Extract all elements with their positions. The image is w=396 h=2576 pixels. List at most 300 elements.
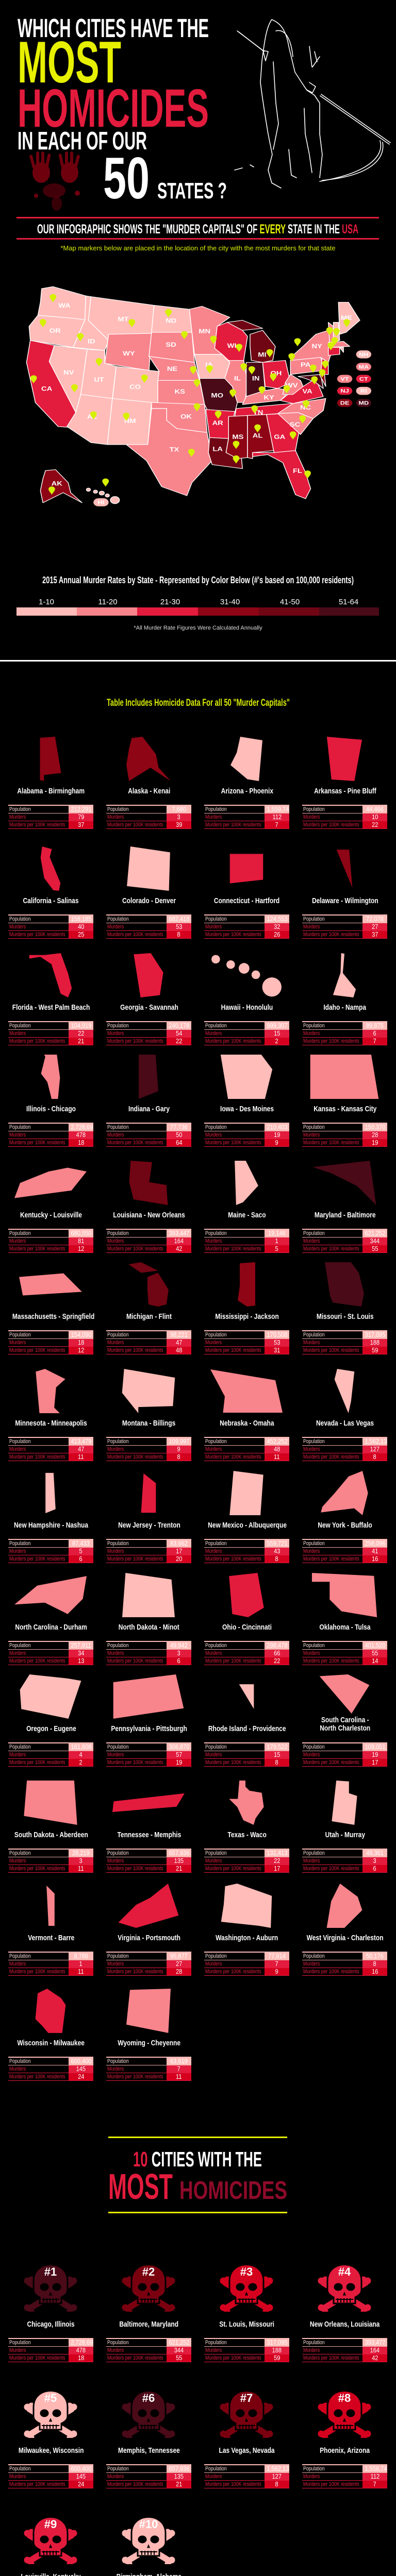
- map state labels: VA: [302, 388, 312, 395]
- card: Minnesota: [8, 1368, 93, 1462]
- name: West Virginia - Charleston: [307, 1934, 383, 1942]
- name: Florida - West Palm Beach: [12, 1003, 90, 1012]
- table: Murders per 100K residents: [9, 2074, 65, 2080]
- map small-state badges: VT: [340, 377, 349, 382]
- name: Louisiana - New Orleans: [113, 1211, 185, 1219]
- table: [106, 1849, 191, 1873]
- map state labels: PA: [301, 361, 311, 368]
- subtitle banner with red rules: [16, 217, 379, 240]
- table: Murders per 100K residents: [303, 1969, 359, 1975]
- table: [106, 1952, 191, 1976]
- table: Murders per 100K residents: [303, 931, 359, 938]
- table: Murders: [205, 924, 222, 930]
- shape: [210, 1674, 283, 1719]
- name: Colorado - Denver: [122, 896, 176, 905]
- shape: [40, 737, 61, 781]
- table: Population: [303, 1744, 325, 1750]
- table: Population: [9, 1332, 31, 1338]
- shape: [308, 1262, 381, 1307]
- name: Idaho - Nampa: [324, 1003, 366, 1012]
- table: [106, 1021, 191, 1045]
- table: Murders: [303, 1340, 320, 1346]
- table: Murders: [9, 924, 26, 930]
- table: Murders: [107, 2347, 124, 2353]
- card: Texas: [204, 1780, 289, 1873]
- heading line 2: MOST: [108, 2166, 173, 2207]
- icon: bloody hands: [29, 151, 80, 211]
- name: Milwaukee, Wisconsin: [19, 2446, 84, 2455]
- table: [302, 805, 387, 829]
- table: Murders per 100K residents: [9, 1347, 65, 1353]
- name: Connecticut - Hartford: [214, 896, 280, 905]
- table: Murders per 100K residents: [205, 2355, 261, 2361]
- table: [302, 1952, 387, 1976]
- table: Population: [205, 1540, 227, 1547]
- table: [8, 1641, 93, 1665]
- map state labels: IL: [234, 375, 241, 382]
- table: Population: [9, 1744, 31, 1750]
- shape: [308, 1055, 381, 1099]
- shape: [308, 1161, 381, 1205]
- table: Murders per 100K residents: [205, 1658, 261, 1664]
- card: Idaho: [302, 953, 387, 1045]
- table: Murders: [303, 2473, 320, 2480]
- table: Murders: [107, 1030, 124, 1037]
- legend range labels: 31-40: [220, 598, 240, 606]
- icon: skull #1: #1: [44, 2265, 57, 2278]
- shape: [112, 1055, 185, 1099]
- name: Arizona - Phoenix: [221, 787, 273, 795]
- card: Georgia: [106, 953, 191, 1045]
- table: Murders per 100K residents: [303, 1658, 359, 1664]
- table: Murders per 100K residents: [303, 1246, 359, 1252]
- table: Murders: [205, 1548, 222, 1554]
- table: Population: [303, 1023, 325, 1029]
- table: Murders per 100K residents: [205, 1759, 261, 1766]
- table: Murders: [205, 2473, 222, 2480]
- card: Nevada: [302, 1368, 387, 1462]
- name: South Dakota - Aberdeen: [14, 1831, 88, 1839]
- map small-state badges: RI: [360, 388, 367, 394]
- name: Missouri - St. Louis: [317, 1312, 373, 1321]
- shape: [127, 846, 170, 891]
- map state labels: WA: [58, 302, 71, 309]
- card: New Jersey: [106, 1470, 191, 1564]
- table: Murders: [205, 1650, 222, 1656]
- header: title and reaper illustration: [18, 13, 391, 211]
- map small-state badges: MA: [358, 365, 369, 370]
- table: [302, 1330, 387, 1354]
- name: Chicago, Illinois: [27, 2320, 75, 2329]
- icon: skull #8: #8: [338, 2392, 351, 2404]
- table: [8, 1952, 93, 1976]
- table: [302, 1021, 387, 1045]
- card: West Virginia: [302, 1883, 387, 1976]
- card: Tennessee: [106, 1780, 191, 1873]
- table: [204, 1641, 289, 1665]
- table: Murders: [303, 1238, 320, 1244]
- top10 card: #10 Birmingham: [106, 2513, 191, 2576]
- icon: skull #1: [22, 2260, 79, 2312]
- table: Population: [205, 806, 227, 812]
- table: Population: [205, 1332, 227, 1338]
- heading: 10 cities with the most homicides: [0, 2133, 396, 2218]
- table: Murders: [107, 1752, 124, 1758]
- name: Tennessee - Memphis: [117, 1831, 181, 1839]
- map state labels: OH: [270, 370, 282, 377]
- table: Murders per 100K residents: [107, 1658, 163, 1664]
- table: [302, 1229, 387, 1253]
- table: Population: [9, 916, 31, 922]
- map state labels: OR: [50, 328, 61, 334]
- table: Murders: [107, 2066, 124, 2072]
- table: Population: [9, 1540, 31, 1547]
- card: New Hampshire: [8, 1470, 93, 1564]
- card: Ohio: [204, 1572, 289, 1666]
- table: Population: [205, 2466, 227, 2472]
- table: Population: [107, 2466, 129, 2472]
- shape: [112, 1573, 185, 1617]
- table: Population: [205, 916, 227, 922]
- table: Murders: [9, 1340, 26, 1346]
- heading: 10 cities with the most homicides: HOMICIDES: [179, 2177, 287, 2205]
- shape: [14, 1781, 87, 1825]
- table: Murders per 100K residents: [205, 1246, 261, 1252]
- map state labels: WV: [286, 382, 298, 389]
- name: New Orleans, Louisiana: [310, 2320, 380, 2329]
- table: Population: [9, 2340, 31, 2346]
- table: [204, 1952, 289, 1976]
- card: South Carolina: [302, 1673, 387, 1767]
- table: [106, 1641, 191, 1665]
- card: Massachusetts: [8, 1261, 93, 1355]
- name: Baltimore, Maryland: [120, 2320, 178, 2329]
- card: Indiana: [106, 1054, 191, 1147]
- table: Murders: [9, 1858, 26, 1864]
- table: Population: [107, 1332, 129, 1338]
- legend: murder rate colour scale: [16, 575, 379, 631]
- legend range labels: [39, 598, 358, 606]
- table: Murders: [303, 1446, 320, 1452]
- table: Murders per 100K residents: [107, 1347, 163, 1353]
- icon: skull #3: #3: [240, 2265, 253, 2278]
- map state labels: IN: [252, 375, 259, 382]
- name: Maryland - Baltimore: [315, 1211, 375, 1219]
- table: Murders per 100K residents: [107, 1866, 163, 1872]
- table: [204, 1330, 289, 1354]
- table: Murders per 100K residents: [205, 2481, 261, 2487]
- card: Wisconsin: [8, 1988, 93, 2081]
- table: [8, 1539, 93, 1563]
- table: Murders per 100K residents: [9, 1246, 65, 1252]
- table: [302, 1123, 387, 1147]
- table: Population: [107, 1953, 129, 1959]
- shape: [112, 1369, 185, 1413]
- card: Nebraska: [204, 1368, 289, 1462]
- shape: [112, 1674, 185, 1719]
- map state labels: UT: [94, 377, 104, 383]
- top10 card: #1 Chicago: [8, 2260, 93, 2363]
- name: Rhode Island - Providence: [208, 1724, 286, 1733]
- card: Arizona: [204, 737, 289, 829]
- table: Murders per 100K residents: [9, 1759, 65, 1766]
- map small-state badges: NJ: [340, 388, 349, 394]
- card: Oklahoma: [302, 1572, 387, 1666]
- table: Murders per 100K residents: [303, 1866, 359, 1872]
- top10 card: #8 Phoenix: [302, 2386, 387, 2489]
- shape: [14, 1262, 87, 1307]
- shape: [308, 1674, 381, 1714]
- card: Montana: [106, 1368, 191, 1462]
- table: [8, 1229, 93, 1253]
- table: Murders per 100K residents: [303, 1140, 359, 1146]
- table: [106, 1742, 191, 1767]
- table: Murders: [205, 1446, 222, 1452]
- table: [204, 2464, 289, 2488]
- table: Murders: [303, 1548, 320, 1554]
- table: Population: [205, 1023, 227, 1029]
- table: Murders per 100K residents: [9, 1140, 65, 1146]
- name: New Jersey - Trenton: [118, 1521, 180, 1530]
- name: Kentucky - Louisville: [20, 1211, 82, 1219]
- title line 1: WHICH CITIES HAVE THE: [18, 13, 209, 43]
- table: [204, 805, 289, 829]
- table: Population: [205, 1124, 227, 1130]
- shape: [40, 846, 61, 891]
- name: California - Salinas: [23, 896, 79, 905]
- table: Population: [107, 1850, 129, 1856]
- table: Murders per 100K residents: [205, 1969, 261, 1975]
- table: Murders: [9, 2066, 26, 2072]
- map state labels: MT: [118, 316, 129, 323]
- map small-state badges: CT: [359, 377, 368, 382]
- icon: skull #2: [120, 2260, 177, 2312]
- shape: [308, 1369, 381, 1413]
- table: Murders: [107, 1650, 124, 1656]
- table: Population: [205, 1230, 227, 1236]
- table: [204, 2338, 289, 2362]
- name: Indiana - Gary: [128, 1105, 170, 1113]
- table: Murders: [303, 1132, 320, 1138]
- table: [204, 1229, 289, 1253]
- map state labels: SC: [290, 421, 301, 428]
- table: [204, 1437, 289, 1461]
- table: Murders: [303, 1030, 320, 1037]
- map small-state badges: NH: [359, 352, 368, 358]
- table: Murders per 100K residents: [9, 1658, 65, 1664]
- table: Population: [303, 1850, 325, 1856]
- icon: skull #10: #10: [139, 2518, 158, 2531]
- table: Murders per 100K residents: [107, 2481, 163, 2487]
- map state labels: NV: [63, 369, 74, 376]
- table: Murders: [303, 1858, 320, 1864]
- table: [302, 2338, 387, 2362]
- table: [204, 1021, 289, 1045]
- table: Murders per 100K residents: [303, 2481, 359, 2487]
- map state labels: SD: [166, 342, 176, 348]
- map state labels: [41, 302, 352, 487]
- shape: [112, 1781, 185, 1825]
- name: New Mexico - Albuquerque: [208, 1521, 287, 1530]
- table: Murders per 100K residents: [205, 1140, 261, 1146]
- table: Murders: [9, 1446, 26, 1452]
- icon: skull #6: #6: [142, 2392, 155, 2404]
- map state labels: KY: [263, 394, 274, 401]
- name: Nebraska - Omaha: [220, 1419, 274, 1428]
- map small-state badges: [93, 350, 371, 506]
- name: Ohio - Cincinnati: [222, 1623, 272, 1632]
- table: [302, 914, 387, 939]
- title: STATES?: STATES ?: [157, 178, 227, 204]
- table: Murders: [9, 1752, 26, 1758]
- table: Murders: [205, 1030, 222, 1037]
- table: Murders: [107, 924, 124, 930]
- table: Murders: [303, 1752, 320, 1758]
- table: [106, 2057, 191, 2081]
- table: Murders: [107, 1132, 124, 1138]
- card: Pennsylvania: [106, 1673, 191, 1767]
- table: Population: [205, 1953, 227, 1959]
- card: Wyoming: [106, 1988, 191, 2081]
- icon: skull #10: [120, 2513, 177, 2564]
- table: Murders: [9, 814, 26, 820]
- table: Population: [107, 1124, 129, 1130]
- map note: *Map markers below are placed in the location of the city with the most murders for that state: [60, 244, 336, 252]
- table: [8, 1330, 93, 1354]
- icon: skull #5: #5: [44, 2392, 57, 2404]
- icon: skull #5: [22, 2386, 79, 2438]
- table: Population: [205, 1642, 227, 1649]
- table: Murders: [107, 1961, 124, 1967]
- card: Mississippi: [204, 1261, 289, 1355]
- table: Murders per 100K residents: [107, 2074, 163, 2080]
- table: [8, 1123, 93, 1147]
- name: Memphis, Tennessee: [118, 2446, 180, 2455]
- shape: [308, 1884, 381, 1928]
- name: Wyoming - Cheyenne: [118, 2039, 180, 2047]
- map state labels: KS: [175, 388, 185, 395]
- table: Population: [303, 1230, 325, 1236]
- table: Population: [9, 1124, 31, 1130]
- name: Oregon - Eugene: [26, 1724, 76, 1733]
- table: Murders per 100K residents: [303, 2355, 359, 2361]
- name: Washington - Auburn: [216, 1934, 278, 1942]
- table: Murders per 100K residents: [107, 931, 163, 938]
- title: MOST: MOST: [18, 30, 121, 95]
- map state labels: IA: [205, 361, 213, 368]
- shape: [112, 1989, 185, 2033]
- legend colour bar: [16, 607, 379, 616]
- table: Murders per 100K residents: [303, 1556, 359, 1562]
- card: Oregon: [8, 1673, 93, 1767]
- name: New Hampshire - Nashua: [14, 1521, 88, 1530]
- table: [8, 1021, 93, 1045]
- table: [204, 1742, 289, 1767]
- name: South Carolina -: [321, 1716, 369, 1724]
- map state labels: OK: [180, 413, 192, 420]
- table: Murders per 100K residents: [205, 1038, 261, 1044]
- table: [106, 1123, 191, 1147]
- table: Murders: [205, 814, 222, 820]
- map state labels: MS: [232, 433, 244, 440]
- table: Murders per 100K residents: [107, 1454, 163, 1460]
- shape: [112, 1161, 185, 1205]
- table: Murders per 100K residents: [9, 1454, 65, 1460]
- card: Washington: [204, 1883, 289, 1976]
- table: Murders: [303, 924, 320, 930]
- map state labels: WI: [227, 342, 237, 349]
- table: Population: [107, 2340, 129, 2346]
- table: Murders: [107, 1858, 124, 1864]
- table: [106, 2338, 191, 2362]
- table: Population: [205, 2340, 227, 2346]
- shape: [336, 850, 353, 888]
- name: North Dakota - Minot: [119, 1623, 179, 1632]
- icon: skull #9: [22, 2513, 79, 2564]
- table: Murders: [9, 1961, 26, 1967]
- card: Maine: [204, 1160, 289, 1253]
- table: Population: [303, 1124, 325, 1130]
- table: Murders per 100K residents: [205, 931, 261, 938]
- top10 card: #4 New Orleans: [302, 2260, 387, 2363]
- map state labels: WY: [123, 350, 135, 357]
- table: Population: [9, 1850, 31, 1856]
- table: Murders: [9, 1548, 26, 1554]
- icon: skull #6: [120, 2386, 177, 2438]
- table: Murders per 100K residents: [303, 1454, 359, 1460]
- table: Murders per 100K residents: [205, 1866, 261, 1872]
- shape: [112, 1262, 185, 1307]
- table: Population: [9, 2058, 31, 2064]
- table: Murders: [205, 1238, 222, 1244]
- table: [302, 1742, 387, 1767]
- legend footnote: *All Murder Rate Figures Were Calculated Annually: [134, 625, 262, 631]
- shape: [14, 1055, 87, 1099]
- shape: [210, 1055, 283, 1099]
- name: Texas - Waco: [227, 1831, 267, 1839]
- card: Virginia: [106, 1883, 191, 1976]
- table: Population: [107, 806, 129, 812]
- top10 card: #7 Las Vegas: [204, 2386, 289, 2489]
- table: Murders per 100K residents: [205, 1556, 261, 1562]
- icon: skull #9: #9: [44, 2518, 57, 2531]
- icon: skull #4: #4: [338, 2265, 351, 2278]
- card: North Dakota: [106, 1572, 191, 1666]
- shape: [112, 1471, 185, 1515]
- card: Arkansas: [302, 737, 387, 829]
- legend range labels: 11-20: [98, 598, 118, 606]
- table: Population: [107, 1230, 129, 1236]
- top10 card: #9 Louisville: [8, 2513, 93, 2576]
- map state labels: LA: [212, 446, 223, 452]
- icon: skull #3: [218, 2260, 275, 2312]
- shape: [308, 1471, 381, 1515]
- table: Murders: [205, 1858, 222, 1864]
- table: [204, 1849, 289, 1873]
- map state labels: MN: [199, 328, 210, 335]
- shape: [308, 1573, 381, 1617]
- map state labels: AZ: [87, 413, 97, 420]
- top10 card: #6 Memphis: [106, 2386, 191, 2489]
- name: Minnesota - Minneapolis: [15, 1419, 87, 1428]
- icon: skull #2: #2: [142, 2265, 155, 2278]
- table: [106, 1437, 191, 1461]
- table: Population: [107, 1642, 129, 1649]
- name: Wisconsin - Milwaukee: [18, 2039, 85, 2047]
- name: St. Louis, Missouri: [220, 2320, 274, 2329]
- card: Vermont: [8, 1883, 93, 1976]
- table: Murders per 100K residents: [9, 1969, 65, 1975]
